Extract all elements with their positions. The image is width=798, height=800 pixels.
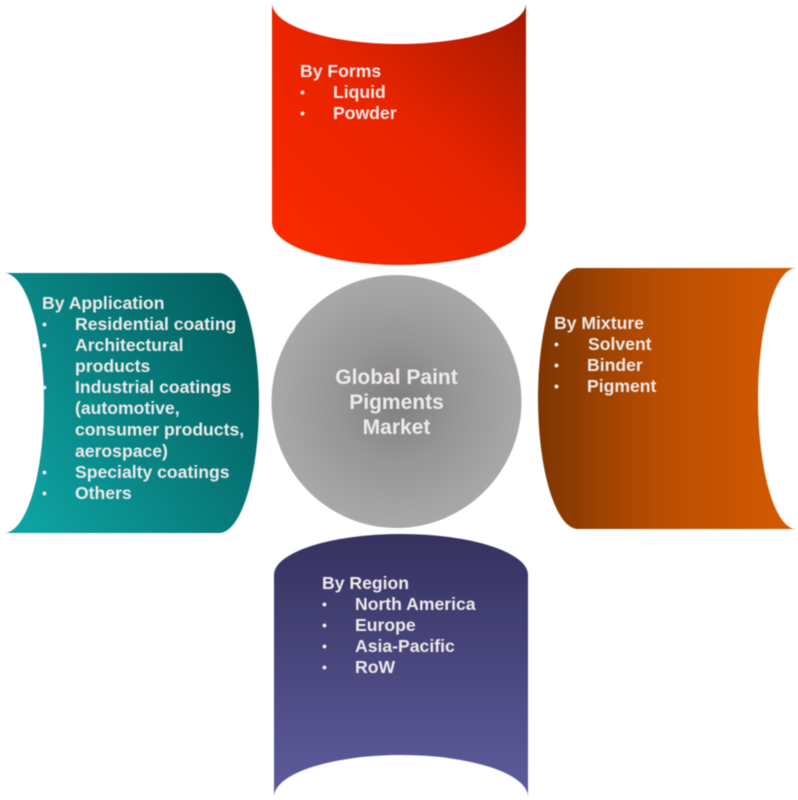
text: by mixture list: Pigment bbox=[587, 376, 657, 396]
title: global paint pigments market: Global Paint bbox=[335, 366, 458, 389]
title: global paint pigments market: Pigments bbox=[349, 391, 444, 414]
panel: by application bbox=[4, 273, 259, 533]
text: by application list: • bbox=[42, 464, 47, 480]
text: by mixture list: • bbox=[554, 378, 559, 394]
text: by application list bbox=[42, 293, 244, 503]
text: by application list: Residential coating bbox=[75, 314, 236, 334]
shape: teal cylinder bbox=[4, 273, 259, 533]
text: by region list: • bbox=[322, 659, 327, 675]
text: by application list: Specialty coatings bbox=[75, 462, 230, 482]
shape: orange cylinder bbox=[538, 268, 796, 529]
title: global paint pigments market: Market bbox=[363, 416, 430, 439]
shape: grey circle bbox=[272, 275, 522, 528]
text: by region list: • bbox=[322, 596, 327, 612]
text: by region list: Asia-Pacific bbox=[355, 636, 455, 656]
text: by forms list: Powder bbox=[333, 103, 397, 123]
text: by region list: RoW bbox=[355, 657, 395, 677]
panel: by mixture bbox=[538, 268, 796, 529]
text: by region list: Europe bbox=[355, 615, 416, 635]
text: by application list: products bbox=[75, 356, 150, 376]
text: by application list: aerospace) bbox=[75, 441, 168, 461]
text: by application list: Others bbox=[75, 483, 132, 503]
panel: by forms bbox=[272, 3, 526, 265]
text: by application list: • bbox=[42, 337, 47, 353]
shape: red cylinder bbox=[272, 3, 526, 265]
text: by application list: • bbox=[42, 379, 47, 395]
text: by mixture list: Solvent bbox=[588, 334, 652, 354]
shape: navy cylinder bbox=[274, 534, 528, 797]
text: by region list: • bbox=[322, 617, 327, 633]
text: by application list: consumer products, bbox=[75, 420, 244, 440]
text: by region list: North America bbox=[355, 594, 476, 614]
text: by mixture list bbox=[554, 313, 657, 396]
text: by application list: (automotive, bbox=[75, 398, 180, 418]
text: by forms list: • bbox=[300, 105, 305, 121]
text: by forms list bbox=[300, 61, 397, 123]
text: by application list: • bbox=[42, 316, 47, 332]
text: by region list: • bbox=[322, 638, 327, 654]
text: by application list: • bbox=[42, 485, 47, 501]
text: by region list: By Region bbox=[322, 573, 409, 593]
panel: center circle bbox=[272, 275, 522, 528]
text: by application list: By Application bbox=[42, 293, 165, 313]
text: by application list: Industrial coatings bbox=[75, 377, 232, 397]
panel: by region bbox=[274, 534, 528, 797]
text: by mixture list: • bbox=[554, 357, 559, 373]
text: by mixture list: By Mixture bbox=[554, 313, 644, 333]
text: by mixture list: Binder bbox=[587, 355, 643, 375]
text: by application list: Architectural bbox=[75, 335, 184, 355]
text: by region list bbox=[322, 573, 476, 677]
text: by forms list: • bbox=[300, 84, 305, 100]
title: global paint pigments market bbox=[335, 366, 458, 439]
text: by forms list: By Forms bbox=[300, 61, 381, 81]
text: by mixture list: • bbox=[554, 336, 559, 352]
text: by forms list: Liquid bbox=[333, 82, 386, 102]
